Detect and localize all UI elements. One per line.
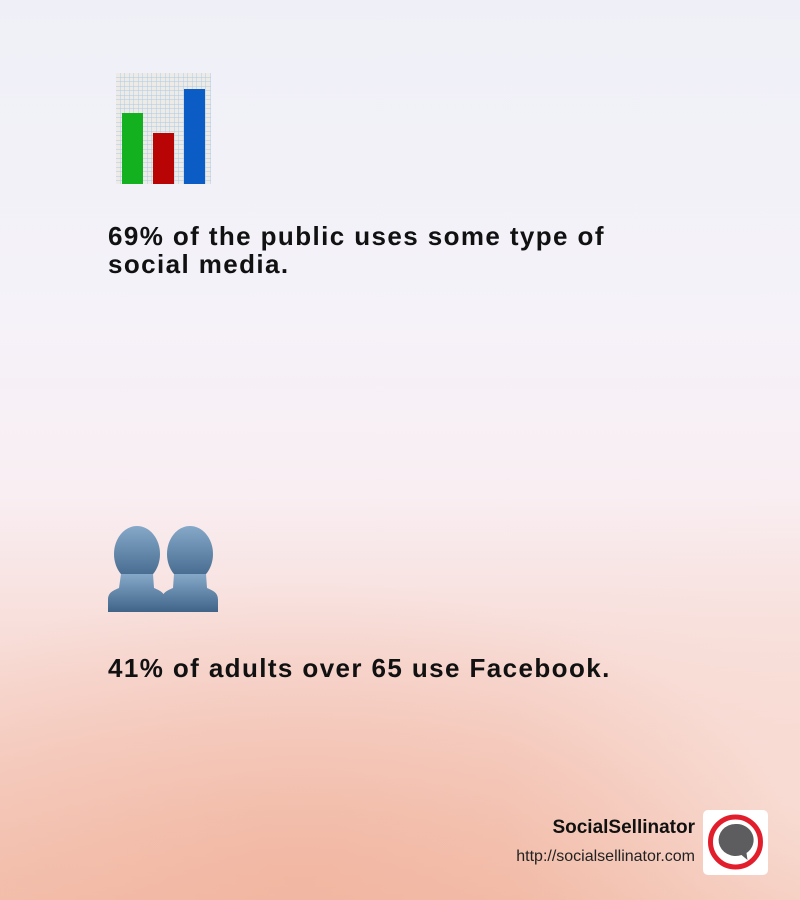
brand url: http://socialsellinator.com xyxy=(516,848,695,865)
icon: people xyxy=(108,526,218,612)
text: stat 1 xyxy=(108,221,605,279)
brand name: SocialSellinator xyxy=(552,817,695,838)
text: stat 2: 41% of adults over 65 use Facebook. xyxy=(108,653,611,683)
text: stat 1: 69% of the public uses some type of xyxy=(108,221,605,251)
icon: bar chart xyxy=(116,73,211,184)
logo xyxy=(703,810,768,875)
text: stat 1: social media. xyxy=(108,249,290,279)
